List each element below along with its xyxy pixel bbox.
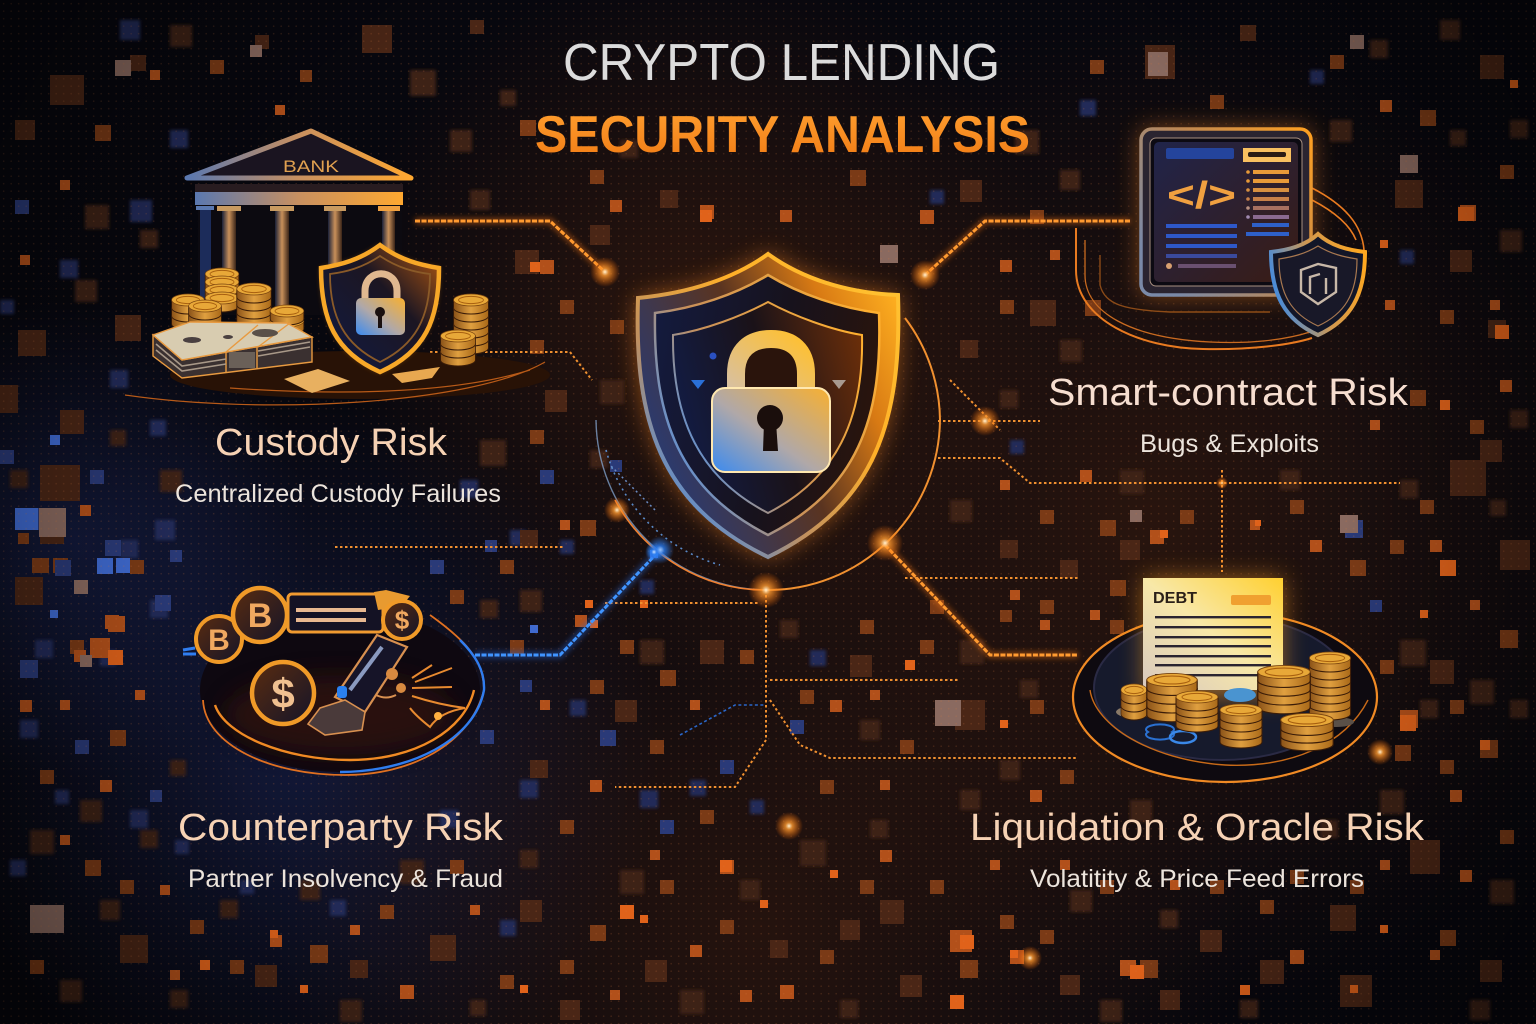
glow nodes (590, 257, 1393, 970)
panel: counterparty risk (178, 588, 504, 893)
coin stacks (172, 268, 488, 366)
icon: linked coins and hand tool (183, 588, 484, 775)
panel: custody risk (125, 131, 550, 508)
connector lines (335, 221, 1400, 787)
heading: Counterparty Risk (178, 807, 504, 849)
title (535, 34, 1030, 164)
heading: Liquidation & Oracle Risk (970, 807, 1425, 849)
panel: smart-contract risk (1048, 128, 1409, 458)
icon: code screen with shield: </> (1167, 175, 1236, 217)
title: SECURITY ANALYSIS (535, 106, 1030, 164)
central security shield (596, 254, 940, 590)
description: Volatitity & Price Feed Errors (1030, 865, 1364, 893)
description: Partner Insolvency & Fraud (188, 865, 503, 893)
coins: B (208, 624, 230, 657)
coins (196, 588, 421, 724)
coins: $ (395, 605, 410, 635)
title: CRYPTO LENDING (563, 34, 1000, 92)
coins: $ (271, 670, 295, 717)
icon: bank with coins and shield: BANK (283, 157, 340, 176)
heading: Smart-contract Risk (1048, 372, 1409, 414)
heading: Custody Risk (215, 422, 448, 464)
icon: small shield (1271, 234, 1365, 335)
icon: padlock (712, 339, 830, 472)
code list (1246, 170, 1289, 236)
tool (335, 635, 407, 712)
columns (196, 206, 400, 319)
description: Bugs & Exploits (1140, 430, 1319, 458)
coins: B (248, 597, 272, 635)
icon: bank with coins and shield (125, 131, 550, 405)
description: Centralized Custody Failures (175, 480, 501, 508)
icon: debt document and coins: DEBT (1153, 590, 1197, 607)
coin stacks (1116, 706, 1154, 718)
icon: debt document and coins (1073, 578, 1377, 782)
cash stacks (153, 322, 312, 378)
icon: custody shield (321, 245, 439, 372)
panel: liquidation and oracle risk (970, 578, 1425, 893)
icon: code screen with shield (1076, 128, 1365, 349)
